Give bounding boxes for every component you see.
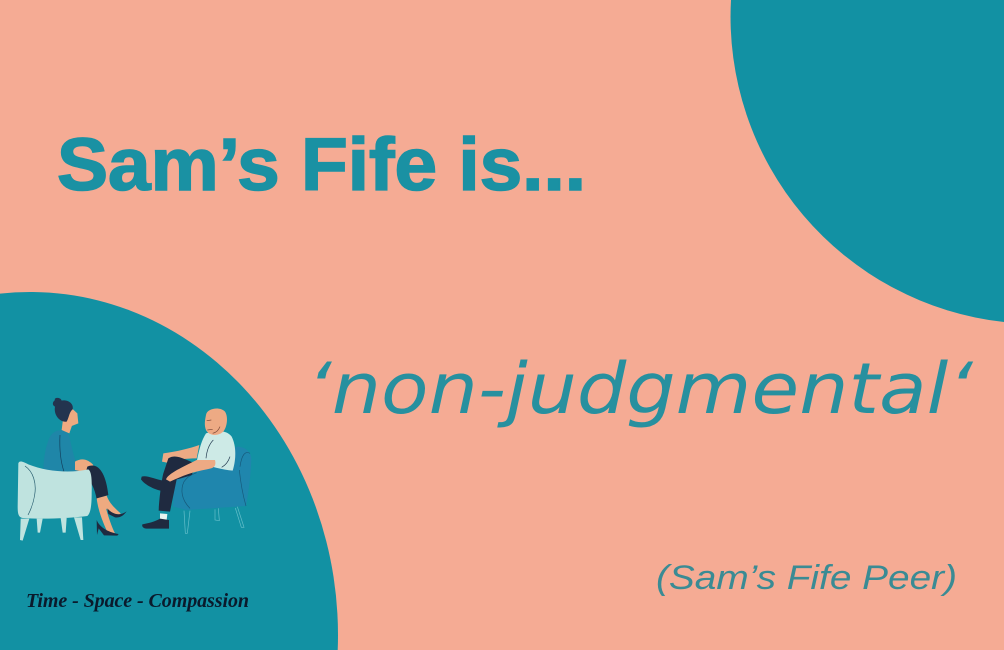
tagline: Time - Space - Compassion [26, 590, 249, 612]
attribution: (Sam’s Fife Peer) [656, 559, 957, 597]
top-right teal circle [731, 0, 1004, 322]
title: Sam’s Fife is... [57, 123, 586, 206]
man in chair [141, 408, 251, 533]
illustration: two people in conversation [18, 398, 251, 541]
quote: non-judgmental: ‘non-judgmental‘ [307, 348, 974, 430]
bottom-left teal circle [0, 292, 338, 650]
woman in chair [18, 398, 127, 541]
